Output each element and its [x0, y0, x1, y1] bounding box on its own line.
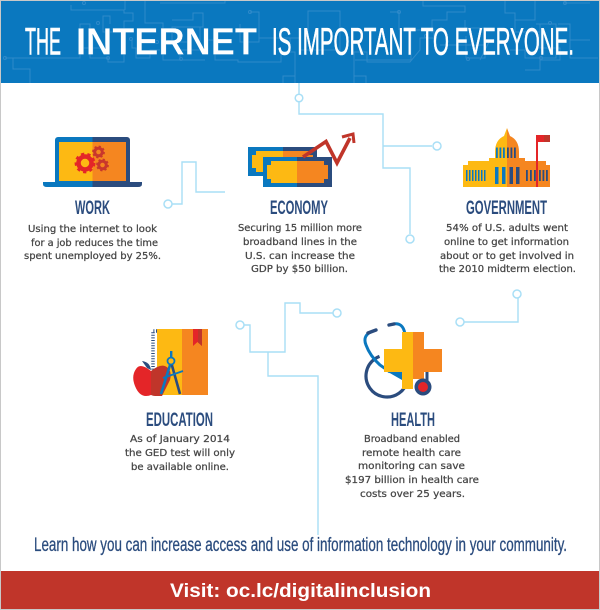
- title: INTERNET: [76, 22, 257, 64]
- heading: education: EDUCATION: [146, 409, 213, 431]
- icon: capitol building with flag: [463, 128, 550, 187]
- heading: economy: ECONOMY: [270, 197, 328, 219]
- panel: government: [439, 128, 576, 275]
- heading: health: HEALTH: [391, 409, 435, 431]
- text: work: spent unemployed by 25%.: [24, 251, 161, 262]
- text: education: As of January 2014: [130, 434, 230, 445]
- footer banner: [0, 571, 600, 609]
- text: economy: [238, 223, 362, 275]
- text: government: [439, 223, 576, 275]
- footer banner: Visit: oc.lc/digitalinclusion: [170, 581, 431, 602]
- text: health: $197 billion in health care: [345, 475, 479, 486]
- text: health: remote health care: [362, 448, 461, 459]
- text: economy: GDP by $50 billion.: [251, 264, 348, 275]
- icon: stethoscope and medical cross: [358, 324, 442, 405]
- text: government: the 2010 midterm election.: [439, 264, 576, 275]
- text: health: Broadband enabled: [364, 434, 460, 445]
- title: INTERNET: [76, 22, 257, 64]
- text: health: [345, 434, 479, 500]
- text: work: [24, 224, 161, 262]
- title: THE: [25, 22, 61, 64]
- panel: economy: [238, 134, 362, 275]
- circuit lines: [164, 83, 521, 535]
- text: education: be available online.: [131, 462, 229, 473]
- text: economy: U.S. can increase the: [245, 251, 355, 262]
- text: government: about or to get involved in: [440, 251, 574, 262]
- text: education: [125, 434, 235, 473]
- icon: money and rising arrow: [248, 134, 354, 187]
- panel: work: [24, 137, 161, 262]
- text: economy: broadband lines in the: [243, 237, 357, 248]
- text: education: the GED test will only: [125, 448, 235, 459]
- icon: book, apple and compass: [133, 329, 208, 396]
- panel: education: [125, 329, 235, 473]
- text: government: online to get information: [444, 237, 569, 248]
- text: work: for a job reduces the time: [31, 238, 158, 249]
- text: government: 54% of U.S. adults went: [446, 223, 568, 234]
- title: [25, 22, 574, 64]
- text: economy: Securing 15 million more: [238, 223, 362, 234]
- header banner: [0, 0, 600, 83]
- text: health: monitoring can save: [358, 461, 465, 472]
- icon: laptop with gears: [43, 137, 142, 187]
- panel: health: [345, 324, 479, 500]
- heading: work: WORK: [75, 197, 110, 219]
- text: health: costs over 25 years.: [360, 489, 465, 500]
- text: work: Using the internet to look: [28, 224, 157, 235]
